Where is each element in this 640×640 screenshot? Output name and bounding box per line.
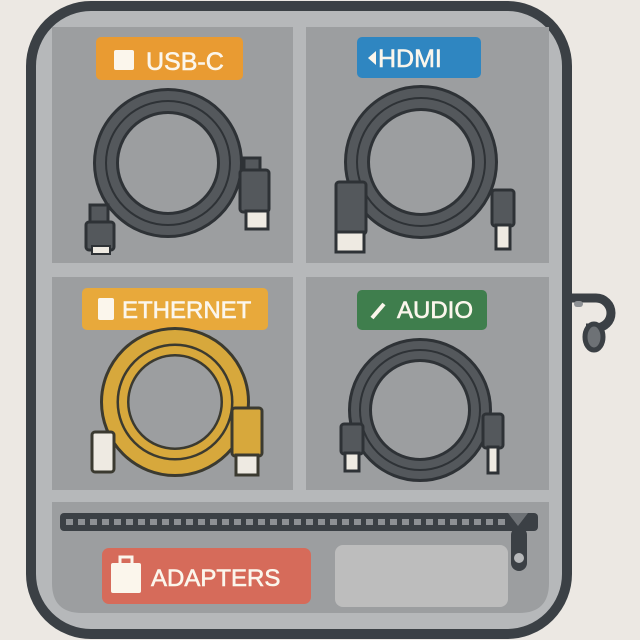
panel: ethernet [52,277,293,490]
zipper track [60,513,538,571]
panel: audio [306,277,549,490]
label: hdmi [357,37,481,78]
cable: audio coil [341,350,503,473]
label: usb-c [96,37,243,80]
panel: usb-c [52,27,293,263]
panel: hdmi [306,27,549,263]
label: usb-c: USB-C [146,48,224,76]
label: hdmi: HDMI [378,45,442,73]
label: adapters: ADAPTERS [151,565,280,592]
cable: hdmi coil [336,98,514,252]
label: audio: AUDIO [397,297,473,324]
label: ethernet [82,288,268,330]
label: ethernet: ETHERNET [122,297,252,324]
panel: adapters pocket [52,502,549,613]
cable: usb-c coil [86,101,269,254]
empty slot [335,545,508,607]
side zipper pull [572,298,611,350]
label: audio [357,290,487,330]
cable: ethernet coil [92,338,262,475]
label: adapters [102,548,311,604]
